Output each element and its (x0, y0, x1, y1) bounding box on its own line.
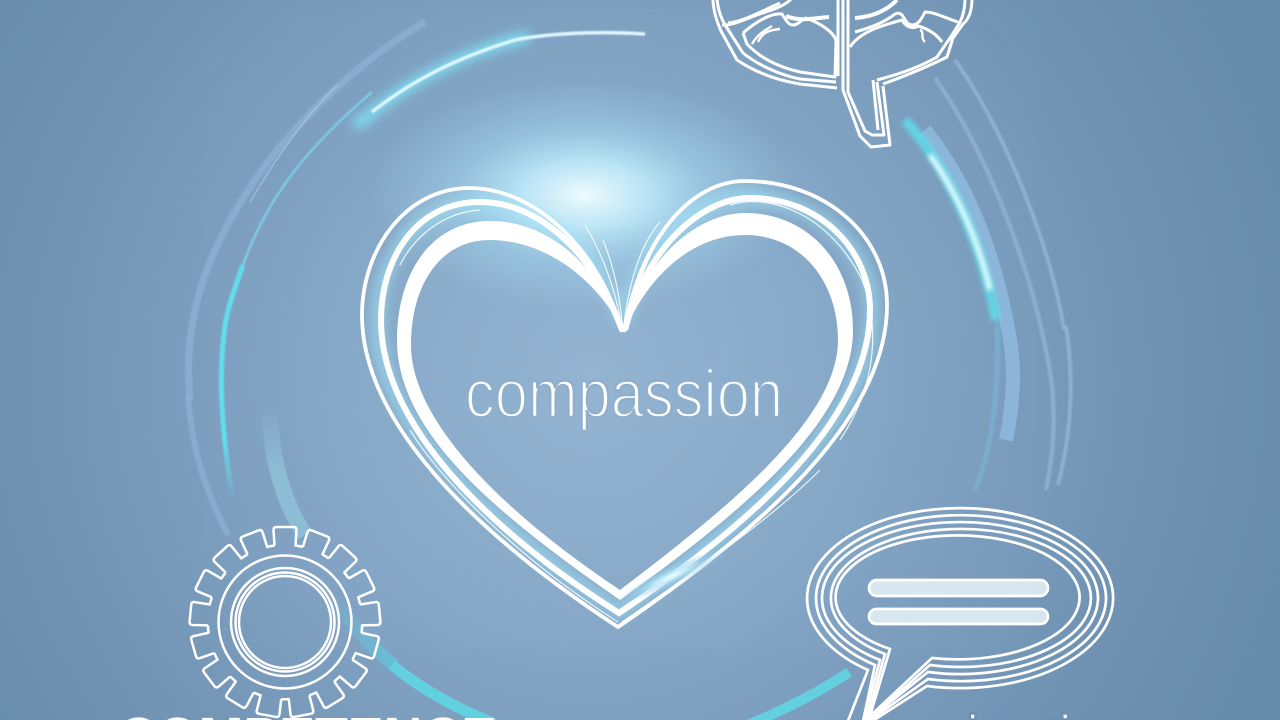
brain: right lobe (850, 0, 972, 84)
arc: right outer 1 (935, 78, 1054, 490)
heart (362, 181, 887, 627)
heart: mid stroke (381, 198, 870, 613)
arc: right outer 3 (1058, 326, 1071, 485)
glow behind heart (360, 80, 880, 530)
heart: bold inner stroke (397, 213, 853, 600)
arc: cyan bright left (221, 265, 243, 496)
arc: top bright core (372, 33, 645, 112)
arc: bottom teal fade (335, 600, 394, 665)
brain: stem (838, 0, 890, 147)
icon: speech bubble (807, 508, 1113, 720)
arc: top bright glow (355, 36, 530, 127)
gear: concentric rings (218, 556, 352, 688)
arc: bottom teal right (745, 672, 849, 720)
arc: outer pale band left (188, 22, 425, 400)
heart: outer stroke (362, 181, 887, 627)
label: compassion: compassion (465, 356, 783, 432)
arc: thin pale left (250, 85, 338, 202)
heart: thin strokes (400, 200, 873, 622)
arc: right outer 2 (955, 60, 1064, 330)
arc: cyan thin left (243, 92, 372, 265)
arc: lower left wide band (270, 405, 305, 535)
arc: right cyan glow (905, 120, 996, 320)
icon: brain (713, 0, 972, 147)
arc: right bright core (930, 155, 990, 290)
arc: lower left pale outer (188, 395, 228, 535)
brain: left lobe (713, 0, 837, 88)
gear: teeth (189, 527, 381, 719)
arc: right lower fade (975, 320, 998, 490)
heart: glow (378, 197, 872, 612)
arc: bottom teal left (392, 665, 495, 720)
icon: gear (189, 527, 381, 719)
arc: right wide band (925, 130, 1013, 440)
heart: bottom sparkle (613, 542, 731, 610)
bubble: concentric outlines (807, 508, 1113, 720)
bubble: text lines (869, 580, 1048, 624)
rings: circular light arcs (188, 22, 1071, 720)
